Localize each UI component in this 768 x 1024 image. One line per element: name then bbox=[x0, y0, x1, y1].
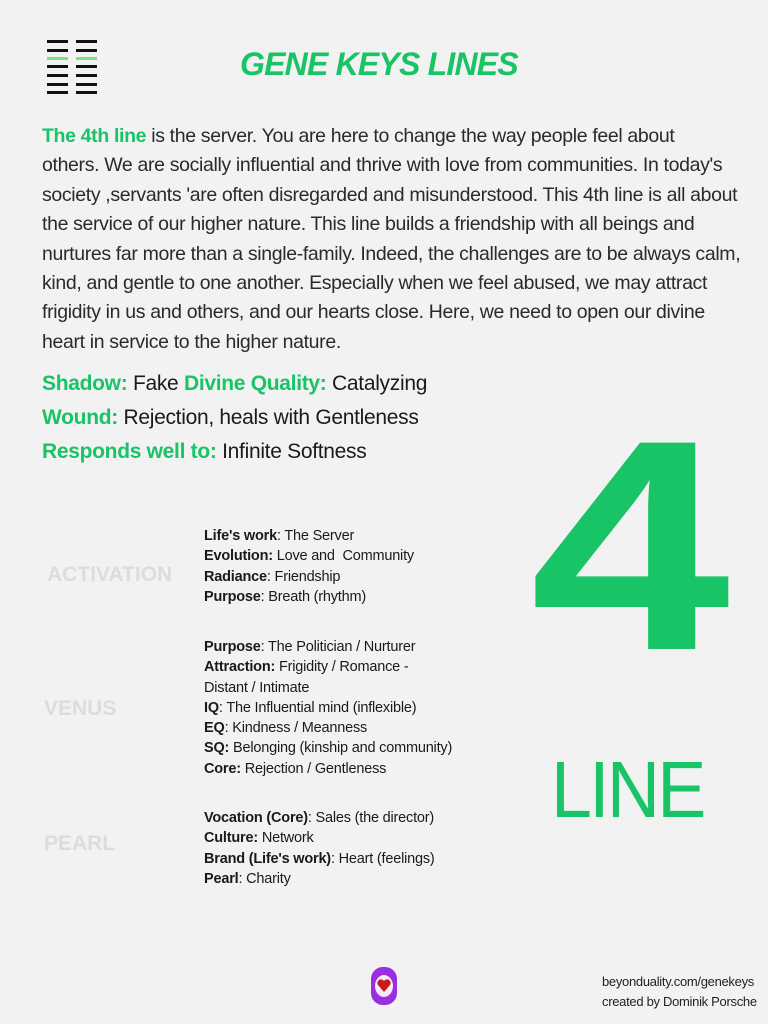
text block: description bbox=[42, 125, 740, 353]
text block: shadow wound responds: Shadow: Fake Divine Quality: Catalyzing bbox=[42, 372, 427, 395]
footer credit: beyonduality.com/genekeys bbox=[602, 974, 754, 989]
label: activation: ACTIVATION bbox=[47, 563, 172, 586]
text block: shadow wound responds bbox=[42, 372, 427, 463]
list: pearl: Pearl: Charity bbox=[204, 871, 291, 887]
list: pearl: Culture: Network bbox=[204, 830, 314, 846]
list: venus bbox=[204, 639, 452, 777]
text block: description: heart in service to the higher nature. bbox=[42, 331, 341, 353]
label: venus: VENUS bbox=[44, 697, 116, 720]
text block: description: frigidity in us and others, and our hearts close. Here, we need to open our divine bbox=[42, 301, 705, 323]
list: venus: Purpose: The Politician / Nurturer bbox=[204, 639, 415, 655]
list: venus: Distant / Intimate bbox=[204, 680, 309, 696]
list: venus: SQ: Belonging (kinship and community) bbox=[204, 740, 452, 756]
text block: description: The 4th line is the server. You are here to change the way people feel about bbox=[42, 125, 674, 147]
list: venus: EQ: Kindness / Meanness bbox=[204, 720, 367, 736]
title: GENE KEYS LINES bbox=[240, 46, 518, 82]
text block: description: society ,servants 'are often disregarded and misunderstood. This 4th line is all about bbox=[42, 184, 737, 206]
list: activation: Radiance: Friendship bbox=[204, 569, 340, 585]
icon: logo heart bbox=[371, 967, 397, 1005]
list: activation: Evolution: Love and Community bbox=[204, 548, 414, 564]
label: pearl: PEARL bbox=[44, 832, 115, 855]
list: pearl bbox=[204, 810, 435, 887]
text block: description: kind, and gentle to one another. Especially when we feel abused, we may attract bbox=[42, 272, 707, 294]
footer credit bbox=[602, 974, 757, 1009]
text block: shadow wound responds: Wound: Rejection, heals with Gentleness bbox=[42, 406, 419, 429]
icon: hexagram bbox=[47, 40, 97, 94]
list: activation: Purpose: Breath (rhythm) bbox=[204, 589, 366, 605]
text block: description: nurtures far more than a single-family. Indeed, the challenges are to be always calm, bbox=[42, 243, 740, 265]
big number 4: 4 bbox=[530, 377, 730, 713]
list: activation bbox=[204, 528, 414, 605]
footer credit: created by Dominik Porsche bbox=[602, 994, 757, 1009]
text block: shadow wound responds: Responds well to: Infinite Softness bbox=[42, 440, 366, 463]
text block: description: the service of our higher nature. This line builds a friendship with all beings and bbox=[42, 213, 694, 235]
list: pearl: Brand (Life's work): Heart (feelings) bbox=[204, 851, 435, 867]
list: venus: Attraction: Frigidity / Romance - bbox=[204, 659, 408, 675]
text block: description: others. We are socially influential and thrive with love from communities. In today's bbox=[42, 154, 722, 176]
list: activation: Life's work: The Server bbox=[204, 528, 354, 544]
list: venus: IQ: The Influential mind (inflexible) bbox=[204, 700, 416, 716]
list: pearl: Vocation (Core): Sales (the director) bbox=[204, 810, 434, 826]
list: venus: Core: Rejection / Gentleness bbox=[204, 761, 386, 777]
big word LINE: LINE bbox=[551, 745, 704, 834]
